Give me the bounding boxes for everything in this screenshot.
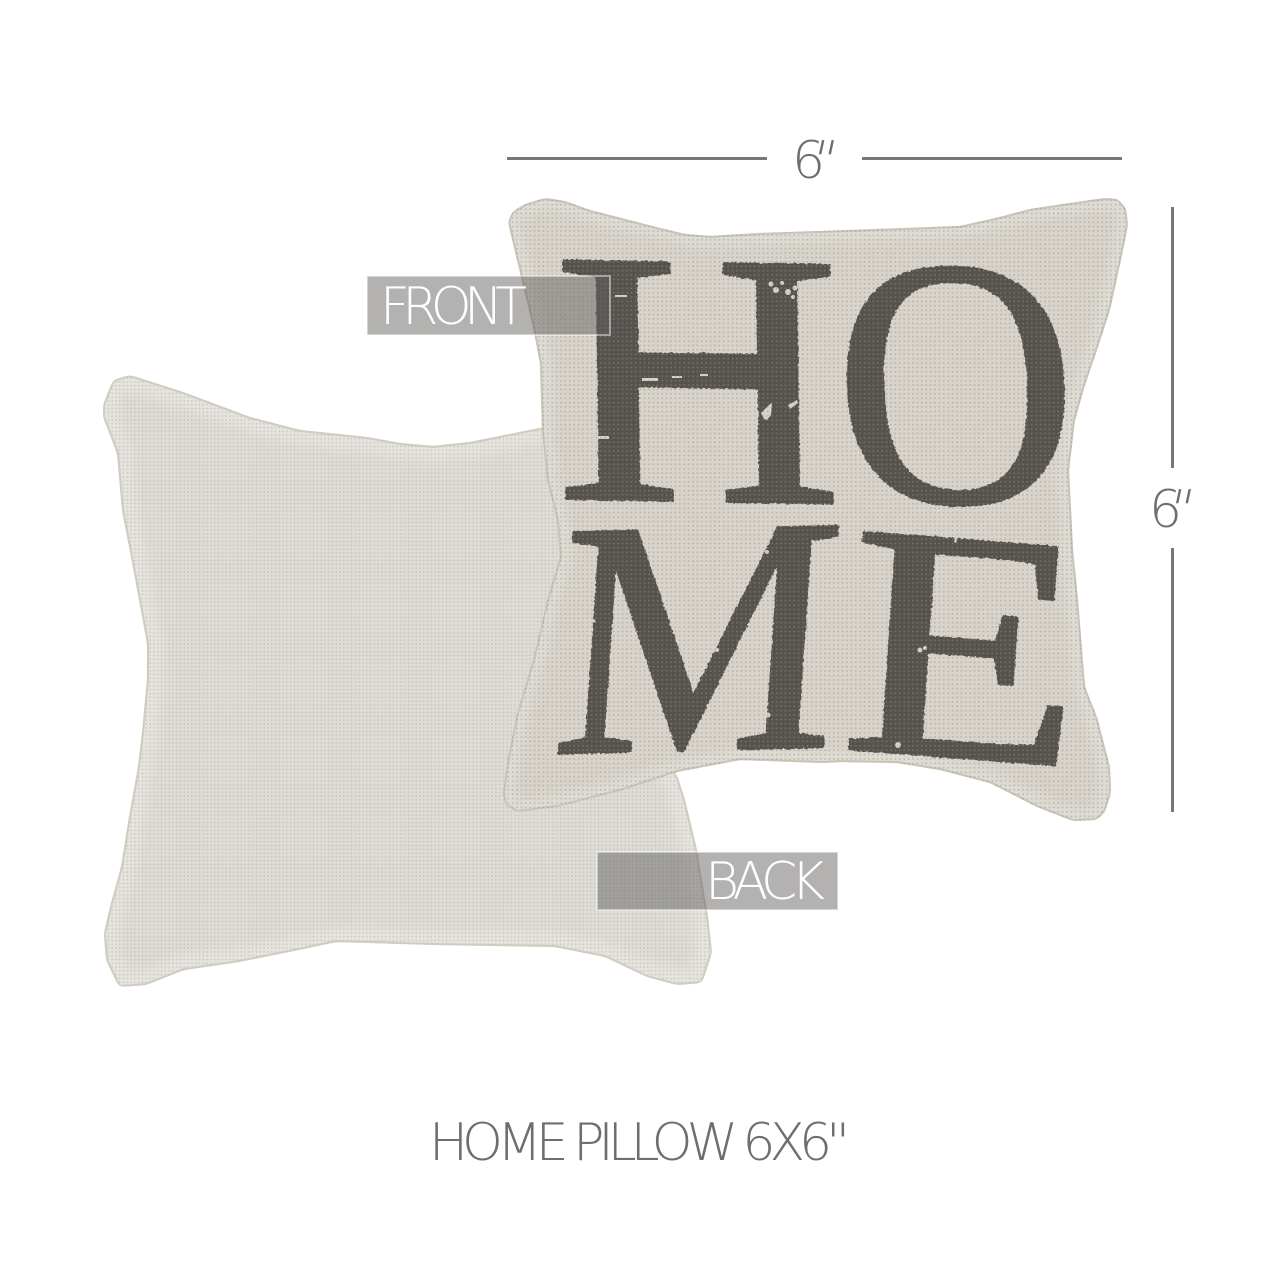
BACK label [597,852,838,912]
width dimension [507,131,1122,191]
width label: " [805,131,842,191]
front pillow rim [503,198,1128,821]
infographic canvas [103,140,1191,1160]
letter E: E [834,455,1097,838]
height dimension [1149,207,1199,812]
height line bottom [1171,548,1174,812]
letter M: M [545,447,852,826]
height label: 6 [1149,480,1182,540]
width line left [507,157,767,160]
back pillow [103,375,712,987]
front pillow fabric [503,198,1128,821]
FRONT label text: FRONT [380,277,527,337]
FRONT label box [367,276,610,335]
letter O: O [829,185,1082,581]
letter H: H [552,176,845,582]
distressed print marks [588,281,959,748]
caption: HOME PILLOW 6X6" [429,1113,850,1173]
FRONT label [367,276,610,337]
height line top [1171,207,1174,468]
front pillow [503,176,1128,838]
BACK label box [597,852,838,910]
height label: " [1162,480,1199,540]
printed word HOME [545,176,1097,838]
BACK label text: BACK [705,852,825,912]
width label: 6 [792,131,825,191]
width line right [862,157,1122,160]
front pillow weave [503,198,1128,821]
